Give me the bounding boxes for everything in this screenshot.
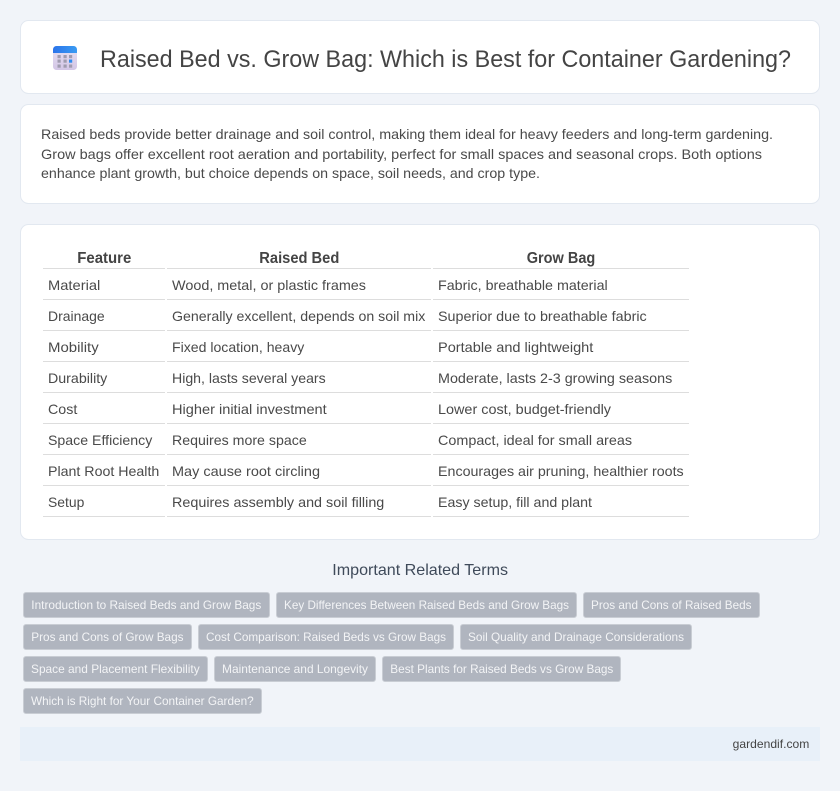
row: Material: Fabric, breathable material bbox=[438, 277, 608, 293]
row: Mobility: Portable and lightweight bbox=[438, 339, 593, 355]
table header row: Grow Bag bbox=[527, 250, 595, 267]
row: Space Efficiency: Compact, ideal for small areas bbox=[438, 432, 632, 448]
table header row bbox=[43, 250, 689, 269]
row: Plant Root Health bbox=[43, 463, 689, 486]
chip: Soil Quality and Drainage Considerations: Soil Quality and Drainage Considerations bbox=[468, 630, 684, 644]
chip: Introduction to Raised Beds and Grow Bags: Introduction to Raised Beds and Grow Bags bbox=[31, 598, 261, 612]
icon: calendar bbox=[53, 46, 77, 70]
related terms heading: Important Related Terms bbox=[332, 562, 508, 579]
row: Cost bbox=[43, 401, 689, 424]
row: Durability: Moderate, lasts 2-3 growing seasons bbox=[438, 370, 672, 386]
row: Plant Root Health: May cause root circling bbox=[172, 463, 320, 479]
row: Material bbox=[43, 277, 689, 300]
chip: Soil Quality and Drainage Considerations bbox=[460, 624, 692, 650]
row: Setup: Requires assembly and soil filling bbox=[172, 494, 384, 510]
row: Durability: High, lasts several years bbox=[172, 370, 326, 386]
footer source: gardendif.com bbox=[733, 737, 809, 751]
intro text: Raised beds provide better drainage and soil control, making them ideal for heavy feeders and long-term gardening. bbox=[41, 126, 773, 142]
chip: Which is Right for Your Container Garden? bbox=[24, 688, 262, 714]
chip: Pros and Cons of Grow Bags: Pros and Cons of Grow Bags bbox=[31, 630, 183, 644]
chip: Maintenance and Longevity bbox=[214, 656, 376, 682]
row: Mobility bbox=[43, 339, 689, 362]
chip: Key Differences Between Raised Beds and Grow Bags: Key Differences Between Raised Beds and Grow Bags bbox=[284, 598, 569, 612]
chip: Key Differences Between Raised Beds and Grow Bags bbox=[276, 592, 576, 618]
row: Cost: Higher initial investment bbox=[172, 401, 327, 417]
row: Durability bbox=[43, 370, 689, 393]
chip: Introduction to Raised Beds and Grow Bags bbox=[24, 592, 270, 618]
row: Plant Root Health: Encourages air pruning, healthier roots bbox=[438, 463, 684, 479]
row: Material: Wood, metal, or plastic frames bbox=[172, 277, 366, 293]
intro text: Grow bags offer excellent root aeration and portability, perfect for small spaces and seasonal crops. Both options bbox=[41, 146, 762, 162]
chip: Space and Placement Flexibility bbox=[24, 656, 208, 682]
row: Cost: Cost bbox=[48, 401, 77, 417]
row: Mobility: Mobility bbox=[48, 339, 99, 355]
chip: Best Plants for Raised Beds vs Grow Bags bbox=[382, 656, 620, 682]
row: Space Efficiency bbox=[43, 432, 689, 455]
row: Plant Root Health: Plant Root Health bbox=[48, 463, 159, 479]
chip: Which is Right for Your Container Garden?: Which is Right for Your Container Garden? bbox=[31, 694, 254, 708]
chip: Best Plants for Raised Beds vs Grow Bags: Best Plants for Raised Beds vs Grow Bags bbox=[390, 662, 613, 676]
chip: Pros and Cons of Raised Beds bbox=[584, 592, 760, 618]
intro text bbox=[41, 126, 773, 181]
chip: Cost Comparison: Raised Beds vs Grow Bags: Cost Comparison: Raised Beds vs Grow Bags bbox=[206, 630, 446, 644]
row: Setup: Setup bbox=[48, 494, 85, 510]
panel: header bbox=[20, 20, 820, 94]
row: Setup: Easy setup, fill and plant bbox=[438, 494, 592, 510]
row: Drainage bbox=[43, 308, 689, 331]
section: related terms bbox=[24, 562, 760, 714]
table header row: Feature bbox=[77, 250, 131, 267]
chip: Maintenance and Longevity: Maintenance and Longevity bbox=[222, 662, 368, 676]
footer bbox=[20, 727, 820, 761]
row: Durability: Durability bbox=[48, 370, 107, 386]
panel: comparison table bbox=[20, 224, 820, 540]
intro text: enhance plant growth, but choice depends on space, soil needs, and crop type. bbox=[41, 165, 540, 181]
row: Drainage: Drainage bbox=[48, 308, 105, 324]
title: Raised Bed vs. Grow Bag: Which is Best for Container Gardening? bbox=[100, 46, 791, 73]
row: Cost: Lower cost, budget-friendly bbox=[438, 401, 611, 417]
row: Material: Material bbox=[48, 277, 100, 293]
row: Setup bbox=[43, 494, 689, 517]
row: Drainage: Generally excellent, depends on soil mix bbox=[172, 308, 425, 324]
row: Drainage: Superior due to breathable fabric bbox=[438, 308, 647, 324]
table header row: Raised Bed bbox=[259, 250, 339, 267]
chip: Cost Comparison: Raised Beds vs Grow Bags bbox=[198, 624, 454, 650]
row: Space Efficiency: Requires more space bbox=[172, 432, 307, 448]
row: Space Efficiency: Space Efficiency bbox=[48, 432, 152, 448]
panel: introduction bbox=[20, 104, 820, 204]
chip: Space and Placement Flexibility: Space and Placement Flexibility bbox=[31, 662, 200, 676]
chip: Pros and Cons of Raised Beds: Pros and Cons of Raised Beds bbox=[591, 598, 752, 612]
row: Mobility: Fixed location, heavy bbox=[172, 339, 304, 355]
chip: Pros and Cons of Grow Bags bbox=[24, 624, 192, 650]
